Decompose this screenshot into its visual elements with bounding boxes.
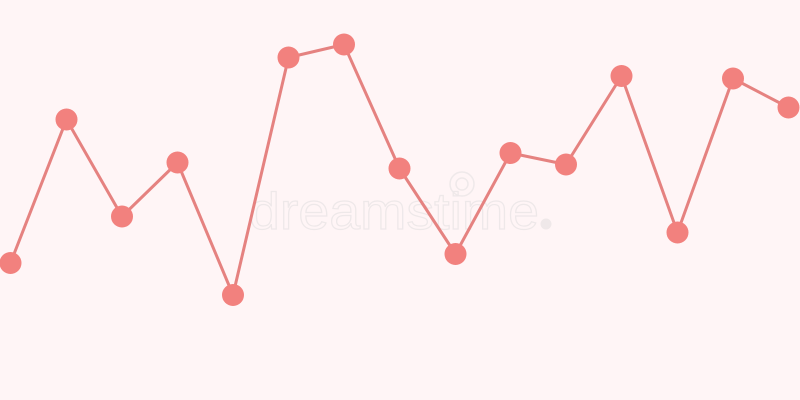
watermark: dreamstime: dreamstime	[249, 183, 539, 241]
data line	[10, 44, 788, 295]
data points	[0, 34, 800, 306]
